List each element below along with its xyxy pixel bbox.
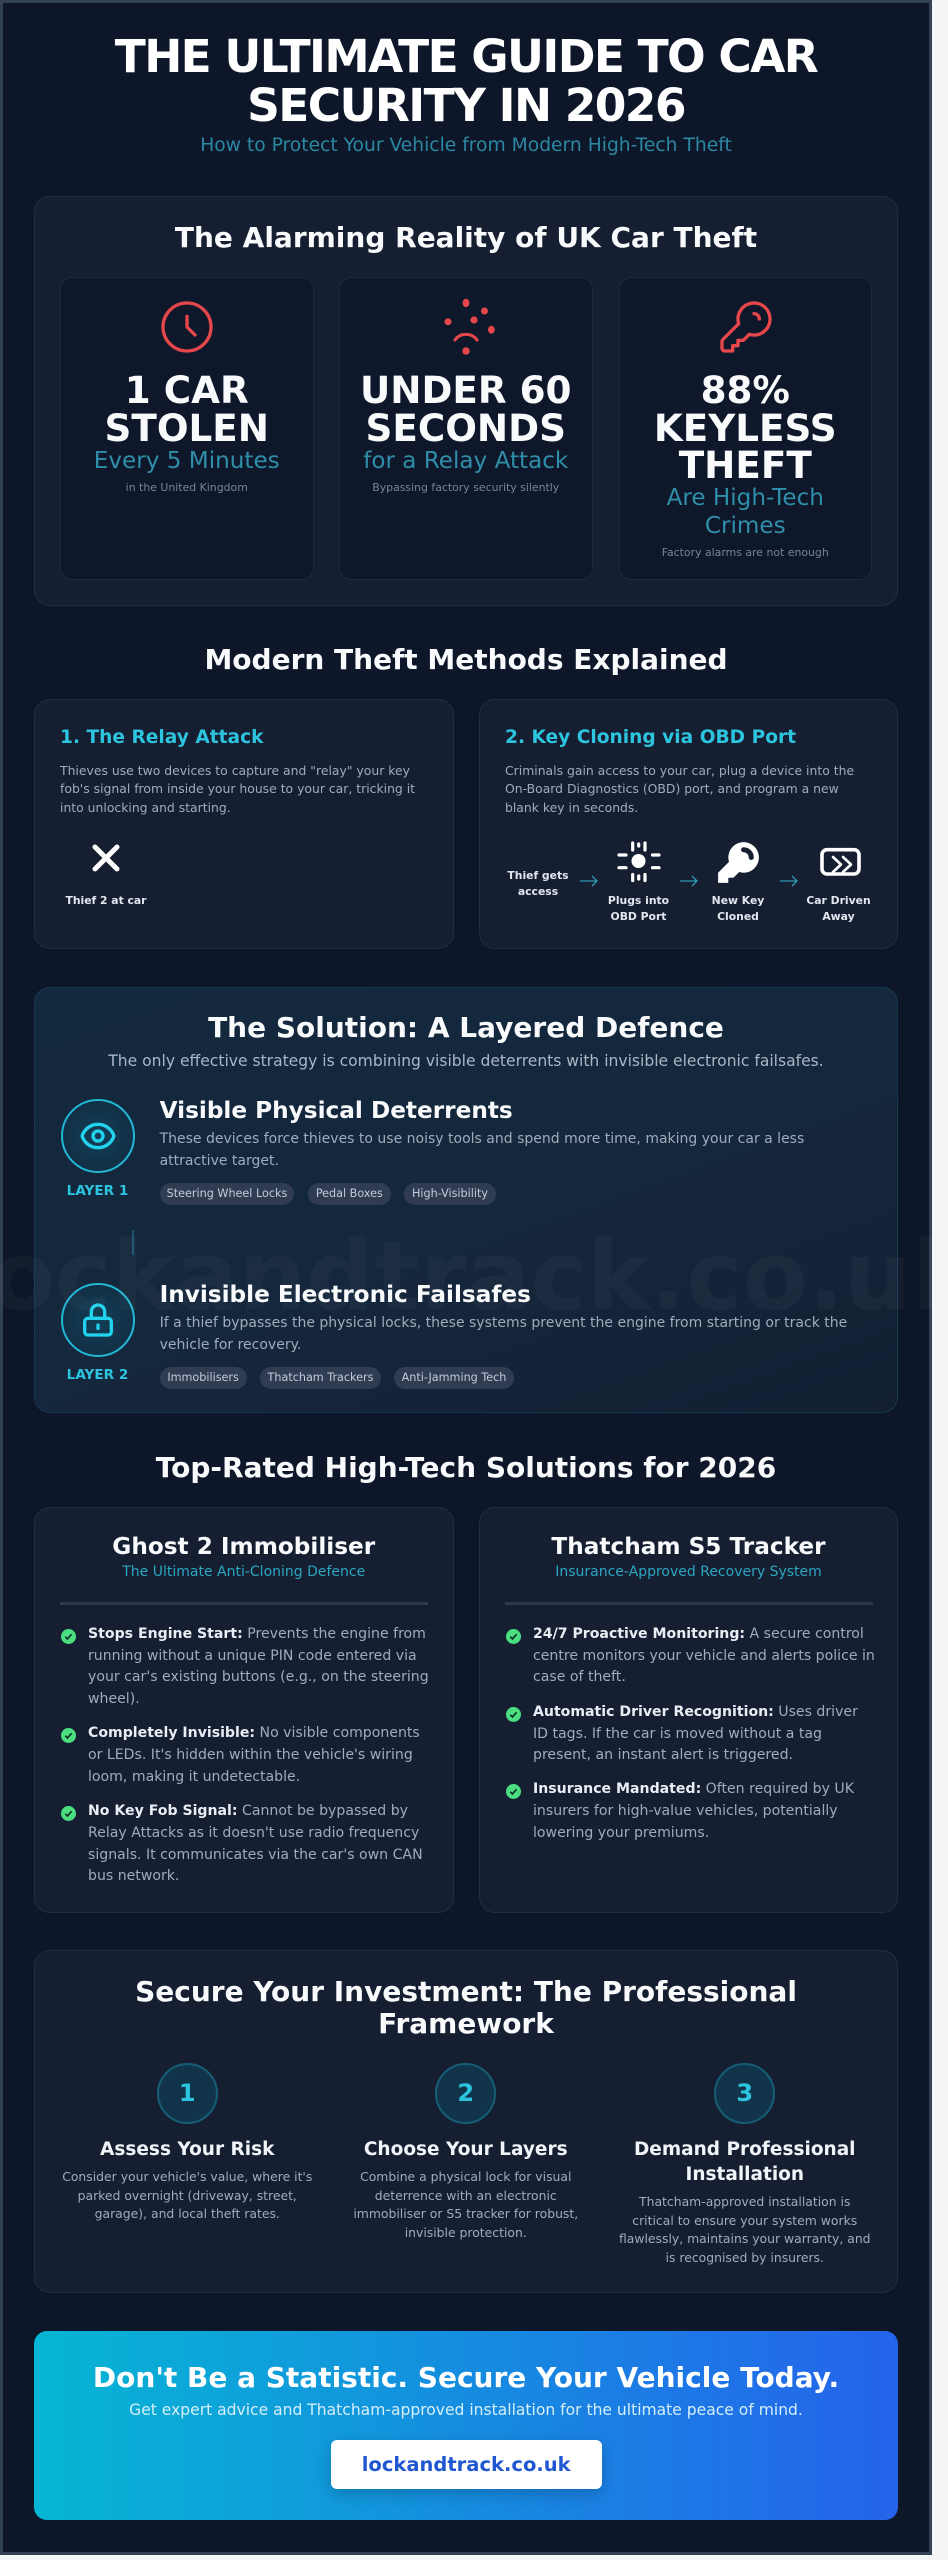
- step description: parked overnight (driveway, street,: [78, 2188, 297, 2203]
- tag: [260, 1367, 381, 1389]
- stat label: for a Relay Attack: [363, 448, 568, 474]
- title: [114, 30, 818, 132]
- feature: no key fob signal: Relay Attacks as it doesn't use radio frequency: [88, 1825, 419, 1841]
- panel: alarming reality stats: [34, 196, 898, 606]
- step description: deterrence with an electronic: [375, 2188, 557, 2203]
- method description: blank key in seconds.: [505, 800, 638, 815]
- tag: Thatcham Trackers: [268, 1371, 373, 1384]
- method heading: 2. Key Cloning via OBD Port: [505, 727, 796, 748]
- stat note: in the United Kingdom: [126, 481, 248, 494]
- connector between layers: [132, 1230, 134, 1255]
- feature: no key fob signal: signals. It communicates via the car's own CAN: [88, 1847, 423, 1863]
- layer description: These devices force thieves to use noisy tools and spend more time, making your car a less: [160, 1131, 804, 1147]
- intro text: The only effective strategy is combining visible deterrents with invisible electronic failsafes.: [108, 1052, 824, 1070]
- tag: Steering Wheel Locks: [167, 1187, 287, 1200]
- heading: framework: Secure Your Investment: The Professional: [135, 1975, 797, 2008]
- feature: no key fob signal: No Key Fob Signal: Cannot be bypassed by: [88, 1803, 408, 1819]
- arrow: [680, 876, 698, 886]
- flow step label: car driven away: [806, 894, 871, 923]
- step number: 3: [736, 2079, 753, 2107]
- product title: Thatcham S5 Tracker: [551, 1533, 826, 1560]
- stat number: 88%: [701, 368, 790, 412]
- layer description: If a thief bypasses the physical locks, these systems prevent the engine from starting or track the: [160, 1315, 847, 1331]
- step description: flawlessly, maintains your warranty, and: [619, 2231, 871, 2246]
- step description: [353, 2169, 578, 2240]
- subtitle: How to Protect Your Vehicle from Modern High-Tech Theft: [200, 135, 732, 156]
- step description: Consider your vehicle's value, where it's: [62, 2169, 312, 2184]
- feature: proactive monitoring: centre monitors your vehicle and alerts police in: [533, 1648, 875, 1664]
- icon: lock in ring: [60, 1283, 134, 1357]
- method description: Thieves use two devices to capture and "relay" your key: [60, 763, 410, 778]
- step number: [157, 2063, 218, 2124]
- step number: 1: [179, 2079, 196, 2107]
- heading: theft methods: Modern Theft Methods Explained: [204, 642, 728, 676]
- feature: no key fob signal: [61, 1803, 423, 1884]
- feature: driver recognition: Automatic Driver Recognition: Uses driver: [533, 1704, 858, 1720]
- flow step label: new key cloned: New Key: [712, 894, 764, 907]
- step description: garage), and local theft rates.: [95, 2206, 280, 2221]
- step title: Installation: [685, 2164, 804, 2185]
- icon: scattered signal dots: [444, 298, 495, 355]
- stat number: UNDER 60: [360, 368, 572, 412]
- panel: professional framework: [34, 1950, 898, 2293]
- icon: OBD chip: [617, 841, 661, 882]
- stat number: THEFT: [679, 443, 812, 487]
- feature: driver recognition: [506, 1704, 858, 1763]
- stat number: [105, 368, 269, 450]
- step title: Choose Your Layers: [364, 2139, 568, 2160]
- label: thief 2 at car: Thief 2 at car: [65, 894, 147, 907]
- tag: Anti-Jamming Tech: [402, 1371, 506, 1384]
- flow step label: plugs into OBD port: OBD Port: [611, 910, 666, 923]
- step number: 2: [457, 2079, 474, 2107]
- step number: [435, 2063, 496, 2124]
- method description: On-Board Diagnostics (OBD) port, and program a new: [505, 781, 839, 796]
- stat note: Bypassing factory security silently: [372, 481, 559, 494]
- step description: [62, 2169, 312, 2221]
- feature: stops engine start: [61, 1626, 429, 1707]
- tag: High-Visibility: [412, 1187, 488, 1200]
- step description: immobiliser or S5 tracker for robust,: [353, 2206, 578, 2221]
- arrow: [580, 876, 598, 886]
- stat label: [666, 485, 824, 539]
- layer label: LAYER 2: [67, 1367, 128, 1383]
- title: THE ULTIMATE GUIDE TO CAR: [115, 30, 817, 83]
- stat card: 88% keyless theft: [618, 277, 872, 580]
- feature: insurance mandated: [506, 1781, 854, 1841]
- tag: Pedal Boxes: [316, 1187, 383, 1200]
- tag: [394, 1367, 514, 1389]
- heading: solutions: Top-Rated High-Tech Solutions for 2026: [156, 1450, 776, 1484]
- feature: proactive monitoring: case of theft.: [533, 1669, 626, 1685]
- step description: critical to ensure your system works: [632, 2213, 857, 2228]
- icon: X mark: [92, 844, 120, 872]
- flow step label: plugs into OBD port: Plugs into: [608, 894, 669, 907]
- icon: clock: [161, 301, 213, 353]
- feature: stops engine start: your car's existing buttons (e.g., on the steering: [88, 1669, 429, 1685]
- layer description: vehicle for recovery.: [160, 1337, 301, 1353]
- stat number: [654, 368, 837, 487]
- tag: Immobilisers: [167, 1371, 239, 1384]
- step 1: [62, 2063, 312, 2221]
- feature: completely invisible: Completely Invisible: No visible components: [88, 1725, 420, 1741]
- tag: [160, 1367, 247, 1389]
- tag: [404, 1183, 496, 1205]
- feature: driver recognition: present, an instant alert is triggered.: [533, 1747, 793, 1763]
- feature: no key fob signal: bus network.: [88, 1868, 179, 1884]
- feature: insurance mandated: insurers for high-value vehicles, potentially: [533, 1803, 838, 1819]
- layer description: [160, 1315, 847, 1353]
- stat card: under 60 seconds: [339, 277, 592, 580]
- stat label: Are High-Tech: [667, 485, 824, 511]
- layer title: Visible Physical Deterrents: [160, 1097, 513, 1124]
- feature: stops engine start: wheel).: [88, 1691, 140, 1707]
- icon: eye in ring: [60, 1099, 134, 1173]
- step number: [714, 2063, 775, 2124]
- step title: Assess Your Risk: [100, 2139, 274, 2160]
- step description: invisible protection.: [405, 2225, 527, 2240]
- step 2: [353, 2063, 578, 2240]
- product subtitle: Insurance-Approved Recovery System: [555, 1564, 822, 1580]
- method description: [505, 763, 854, 815]
- call to action banner: [34, 2331, 898, 2520]
- stat number: [360, 368, 572, 450]
- product subtitle: The Ultimate Anti-Cloning Defence: [122, 1564, 365, 1580]
- flow step label: new key cloned: Cloned: [717, 910, 759, 923]
- feature: completely invisible: loom, making it undetectable.: [88, 1769, 300, 1785]
- flow step label: plugs into OBD port: [608, 894, 669, 923]
- CTA text: Get expert advice and Thatcham-approved installation for the ultimate peace of mind.: [129, 2401, 803, 2419]
- feature: completely invisible: [61, 1725, 420, 1785]
- heading: framework: [135, 1975, 797, 2040]
- icon: car driven away: [820, 848, 861, 876]
- heading: layered defence: The Solution: A Layered Defence: [208, 1010, 724, 1044]
- feature: insurance mandated: Insurance Mandated: Often required by UK: [533, 1781, 854, 1797]
- layer 1: physical deterrents: [61, 1097, 804, 1205]
- product title: Ghost 2 Immobiliser: [112, 1533, 375, 1560]
- step description: Thatcham-approved installation is: [639, 2194, 850, 2209]
- heading: framework: Framework: [378, 2006, 554, 2040]
- stat number: KEYLESS: [654, 406, 837, 450]
- stat card: 1 car stolen: [60, 277, 314, 580]
- stat number: 1 CAR: [125, 368, 249, 412]
- stat number: STOLEN: [105, 406, 269, 450]
- flow step label: thief gets access: [507, 869, 569, 898]
- tag: [160, 1183, 294, 1205]
- flow step label: car driven away: Car Driven: [806, 894, 871, 907]
- feature: driver recognition: ID tags. If the car is moved without a tag: [533, 1726, 822, 1742]
- CTA heading: Don't Be a Statistic. Secure Your Vehicle Today.: [93, 2360, 839, 2394]
- heading: alarming reality: The Alarming Reality of UK Car Theft: [175, 220, 757, 254]
- flow step label: new key cloned: [712, 894, 764, 923]
- layer description: attractive target.: [160, 1153, 279, 1169]
- step title: Demand Professional: [634, 2139, 856, 2160]
- feature: completely invisible: or LEDs. It's hidden within the vehicle's wiring: [88, 1747, 413, 1763]
- step description: is recognised by insurers.: [666, 2250, 824, 2265]
- panel: key cloning: [479, 699, 898, 949]
- layer label: LAYER 1: [67, 1183, 128, 1199]
- layer title: Invisible Electronic Failsafes: [160, 1281, 531, 1308]
- stat number: SECONDS: [366, 406, 566, 450]
- method description: [60, 763, 415, 815]
- arrow: [780, 876, 798, 886]
- tag: [308, 1183, 391, 1205]
- CTA button: lockandtrack.co.uk: [362, 2453, 571, 2476]
- step description: Combine a physical lock for visual: [360, 2169, 571, 2184]
- CTA button: [331, 2440, 602, 2489]
- panel: layered defence: [34, 987, 898, 1413]
- stat label: Every 5 Minutes: [94, 448, 280, 474]
- icon: key: [720, 301, 772, 353]
- panel: Thatcham S5 tracker: [479, 1507, 898, 1913]
- title: SECURITY IN 2026: [247, 79, 685, 132]
- feature: stops engine start: Stops Engine Start: Prevents the engine from: [88, 1626, 426, 1642]
- flow step label: thief gets access: access: [518, 885, 558, 898]
- panel: relay attack: [34, 699, 454, 949]
- method description: fob's signal from inside your house to your car, tricking it: [60, 781, 415, 796]
- flow step label: thief gets access: Thief gets: [507, 869, 569, 882]
- flow step label: car driven away: Away: [822, 910, 855, 923]
- method description: Criminals gain access to your car, plug a device into the: [505, 763, 854, 778]
- step description: [619, 2194, 871, 2265]
- feature: proactive monitoring: 24/7 Proactive Monitoring: A secure control: [533, 1626, 864, 1642]
- method description: into unlocking and starting.: [60, 800, 231, 815]
- step 3: [619, 2063, 871, 2265]
- icon: solid key: [718, 842, 759, 883]
- step title: [634, 2139, 856, 2185]
- stat note: Factory alarms are not enough: [662, 546, 829, 559]
- layer 2: electronic failsafes: [61, 1281, 847, 1389]
- stat label: Crimes: [705, 513, 786, 539]
- feature: proactive monitoring: [506, 1626, 875, 1685]
- feature: stops engine start: running without a unique PIN code entered via: [88, 1648, 417, 1664]
- panel: Ghost 2 immobiliser: [34, 1507, 454, 1913]
- layer description: [160, 1131, 804, 1169]
- feature: insurance mandated: lowering your premiums.: [533, 1825, 709, 1841]
- method heading: 1. The Relay Attack: [60, 727, 263, 748]
